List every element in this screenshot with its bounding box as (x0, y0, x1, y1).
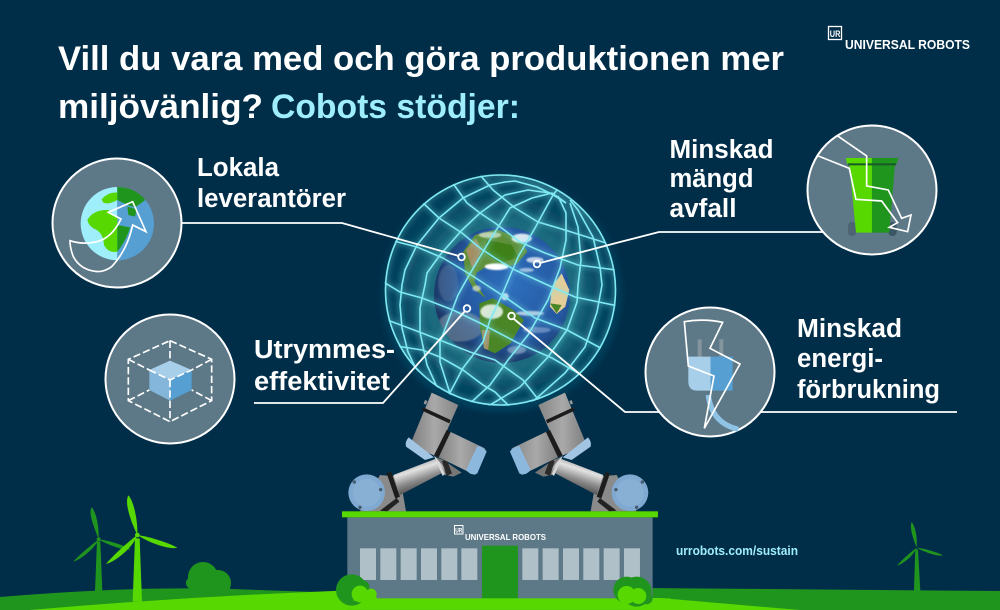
robots (348, 393, 648, 511)
logo: Universal Robots: UR (830, 29, 840, 40)
wireframe sphere (382, 175, 618, 412)
building logo: UNIVERSAL ROBOTS (465, 532, 546, 542)
label: minskad mängd avfall: avfall (670, 195, 736, 223)
label: lokala leverantörer: Lokala (197, 154, 280, 182)
label: utrymmeseffektivitet (254, 336, 395, 396)
logo: Universal Robots (828, 26, 970, 52)
ground hills (0, 588, 1000, 610)
label: minskad mängd avfall (670, 136, 774, 223)
label: minskad energiförbrukning (797, 315, 940, 404)
label: minskad energiförbrukning: Minskad (797, 315, 902, 343)
logo: Universal Robots: UNIVERSAL ROBOTS (845, 38, 970, 52)
label: lokala leverantörer: leverantörer (197, 185, 346, 213)
earth (434, 227, 570, 363)
connector lines (182, 223, 957, 412)
bush left (186, 562, 231, 596)
building logo (454, 526, 546, 542)
globe halo (378, 168, 622, 412)
panel: minskad energiförbrukning (646, 308, 774, 436)
title (58, 40, 784, 126)
label: lokala leverantörer (197, 154, 346, 213)
title: Cobots stödjer: (271, 88, 520, 126)
wind turbine right (897, 522, 943, 591)
bushes at building (336, 574, 653, 607)
label: utrymmeseffektivitet: effektivitet (254, 368, 391, 396)
title: Vill du vara med och göra produktionen mer (58, 40, 784, 78)
label: minskad energiförbrukning: energi- (797, 345, 883, 373)
building logo: UR (455, 528, 463, 534)
label: utrymmeseffektivitet: Utrymmes- (254, 336, 395, 364)
panel: minskad mängd avfall (808, 126, 936, 254)
label: minskad mängd avfall: mängd (670, 165, 754, 193)
connector dots (458, 254, 540, 319)
panel: lokala leverantörer (52, 158, 182, 288)
title: miljövänlig? (58, 88, 263, 126)
label: minskad mängd avfall: Minskad (670, 136, 774, 164)
factory building (330, 511, 670, 610)
panel: utrymmeseffektivitet (106, 314, 234, 444)
wind turbines left (73, 495, 177, 602)
label: minskad energiförbrukning: förbrukning (797, 376, 940, 404)
url: urrobots.com/sustain (676, 544, 798, 558)
